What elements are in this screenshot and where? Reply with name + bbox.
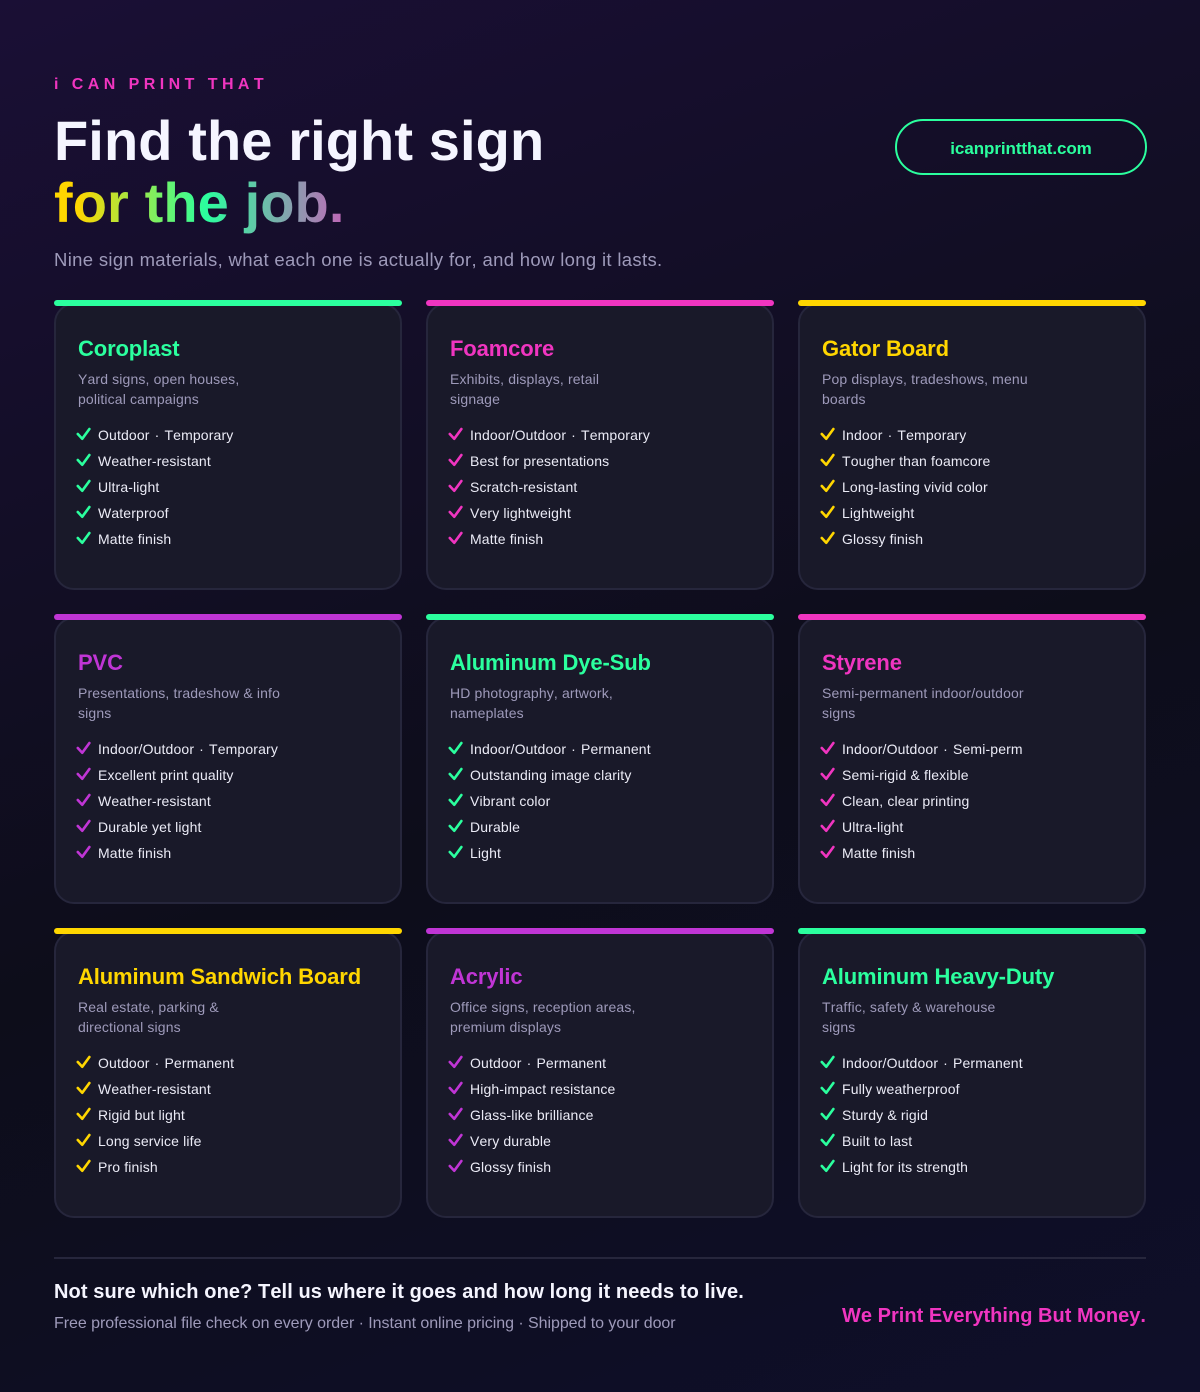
feature list: Gator Board: Indoor · Temporary [842,427,966,443]
feature list: Gator Board: Long-lasting vivid color [842,479,988,495]
feature list: Foamcore: Scratch-resistant [470,479,577,495]
feature list: Coroplast: Waterproof [98,505,169,521]
feature list: Aluminum Heavy-Duty: Indoor/Outdoor · Permanent [842,1055,1023,1071]
feature list: Acrylic: Glass-like brilliance [470,1107,594,1123]
uses: Styrene: signs [822,705,855,721]
feature list: PVC: Matte finish [98,845,171,861]
uses: Aluminum Heavy-Duty: signs [822,1019,855,1035]
feature list: Coroplast: Ultra-light [98,479,159,495]
feature list: Foamcore: Very lightweight [470,505,571,521]
feature list: Styrene [820,741,1023,861]
panel: Styrene [798,614,1146,904]
feature list: Acrylic: Outdoor · Permanent [470,1055,606,1071]
uses: Acrylic: Office signs, reception areas, [450,999,636,1015]
feature list: Coroplast: Weather-resistant [98,453,211,469]
feature list: Aluminum Heavy-Duty: Light for its strength [842,1159,968,1175]
feature list: Coroplast: Matte finish [98,531,171,547]
uses: Aluminum Dye-Sub: nameplates [450,705,524,721]
feature list: Foamcore [448,427,650,547]
panel: Aluminum Heavy-Duty [798,928,1146,1218]
uses: Acrylic [450,999,636,1035]
website pill [895,119,1147,175]
uses: Aluminum Dye-Sub: HD photography, artwork, [450,685,613,701]
feature list: Acrylic [448,1055,615,1175]
feature list: Aluminum Heavy-Duty: Built to last [842,1133,912,1149]
feature list: Aluminum Dye-Sub [448,741,651,861]
feature list: PVC: Indoor/Outdoor · Temporary [98,741,278,757]
feature list: Aluminum Sandwich Board: Long service life [98,1133,202,1149]
feature list: Aluminum Sandwich Board: Pro finish [98,1159,158,1175]
website pill: icanprintthat.com [950,139,1092,158]
uses: Styrene [822,685,1024,721]
feature list: Acrylic: Glossy finish [470,1159,551,1175]
feature list: Foamcore: Best for presentations [470,453,609,469]
feature list: Styrene: Matte finish [842,845,915,861]
feature list: PVC: Durable yet light [98,819,202,835]
feature list: Gator Board: Glossy finish [842,531,923,547]
heading: Foamcore: Foamcore [450,336,554,361]
feature list: Aluminum Dye-Sub: Light [470,845,501,861]
title [54,109,544,234]
feature list: Foamcore: Matte finish [470,531,543,547]
feature list: Gator Board [820,427,990,547]
feature list: PVC [76,741,278,861]
panel: PVC [54,614,402,904]
feature list: Aluminum Dye-Sub: Durable [470,819,520,835]
heading: Acrylic: Acrylic [450,964,522,989]
footer details: Free professional file check on every order · Instant online pricing · Shipped to your door [54,1315,676,1332]
footer tagline: We Print Everything But Money. [842,1305,1146,1327]
feature list: Acrylic: High-impact resistance [470,1081,615,1097]
uses: Coroplast: Yard signs, open houses, political campaigns [78,371,239,407]
uses: PVC: Presentations, tradeshow & info [78,685,280,701]
heading: Aluminum Dye-Sub: Aluminum Dye-Sub [450,650,651,675]
footer headline: Not sure which one? Tell us where it goes and how long it needs to live. [54,1281,744,1303]
feature list: Aluminum Sandwich Board [76,1055,234,1175]
subtitle: Nine sign materials, what each one is actually for, and how long it lasts. [54,249,662,270]
heading: PVC: PVC [78,650,123,675]
uses: Foamcore: signage [450,391,500,407]
heading: Styrene: Styrene [822,650,902,675]
feature list: Styrene: Semi-rigid & flexible [842,767,969,783]
feature list: Gator Board: Lightweight [842,505,914,521]
title: Find the right sign [54,109,544,172]
feature list: Aluminum Dye-Sub: Vibrant color [470,793,550,809]
feature list: Styrene: Indoor/Outdoor · Semi-perm [842,741,1023,757]
feature list: Styrene: Clean, clear printing [842,793,969,809]
uses: Aluminum Heavy-Duty [822,999,995,1035]
feature list: Coroplast: Outdoor · Temporary [98,427,233,443]
feature list: Aluminum Dye-Sub: Outstanding image clarity [470,767,631,783]
heading: Gator Board: Gator Board [822,336,949,361]
uses: Aluminum Heavy-Duty: Traffic, safety & warehouse [822,999,995,1015]
feature list: Aluminum Heavy-Duty: Sturdy & rigid [842,1107,928,1123]
uses: Acrylic: premium displays [450,1019,561,1035]
uses: Foamcore: Exhibits, displays, retail [450,371,599,387]
feature list: Aluminum Heavy-Duty [820,1055,1023,1175]
feature list: Acrylic: Very durable [470,1133,551,1149]
feature list: PVC: Excellent print quality [98,767,234,783]
uses: Gator Board: boards [822,391,866,407]
uses: Aluminum Sandwich Board [78,999,219,1035]
panel: Gator Board [798,300,1146,590]
feature list: Aluminum Dye-Sub: Indoor/Outdoor · Permanent [470,741,651,757]
uses: PVC [78,685,280,721]
panel: Aluminum Dye-Sub [426,614,774,904]
feature list: Aluminum Sandwich Board: Rigid but light [98,1107,185,1123]
heading: Coroplast: Coroplast [78,336,180,361]
feature list: Aluminum Sandwich Board: Outdoor · Permanent [98,1055,234,1071]
feature list: Styrene: Ultra-light [842,819,903,835]
feature list: Coroplast [76,427,234,547]
title: for the job. [54,171,344,234]
uses: Aluminum Dye-Sub [450,685,613,721]
feature list: Aluminum Sandwich Board: Weather-resistant [98,1081,211,1097]
panel: Aluminum Sandwich Board [54,928,402,1218]
eyebrow brand label: i CAN PRINT THAT [54,76,268,93]
uses: Foamcore [450,371,599,407]
feature list: Gator Board: Tougher than foamcore [842,453,990,469]
uses: Gator Board: Pop displays, tradeshows, menu [822,371,1028,387]
uses: Styrene: Semi-permanent indoor/outdoor [822,685,1024,701]
feature list: PVC: Weather-resistant [98,793,211,809]
feature list: Aluminum Heavy-Duty: Fully weatherproof [842,1081,960,1097]
uses: Gator Board [822,371,1028,407]
feature list: Foamcore: Indoor/Outdoor · Temporary [470,427,650,443]
uses: Aluminum Sandwich Board: Real estate, parking & [78,999,219,1015]
uses: PVC: signs [78,705,111,721]
panel: Acrylic [426,928,774,1218]
uses: Aluminum Sandwich Board: directional signs [78,1019,181,1035]
heading: Aluminum Sandwich Board: Aluminum Sandwich Board [78,964,361,989]
panel: Coroplast [54,300,402,590]
heading: Aluminum Heavy-Duty: Aluminum Heavy-Duty [822,964,1054,989]
panel: Foamcore [426,300,774,590]
